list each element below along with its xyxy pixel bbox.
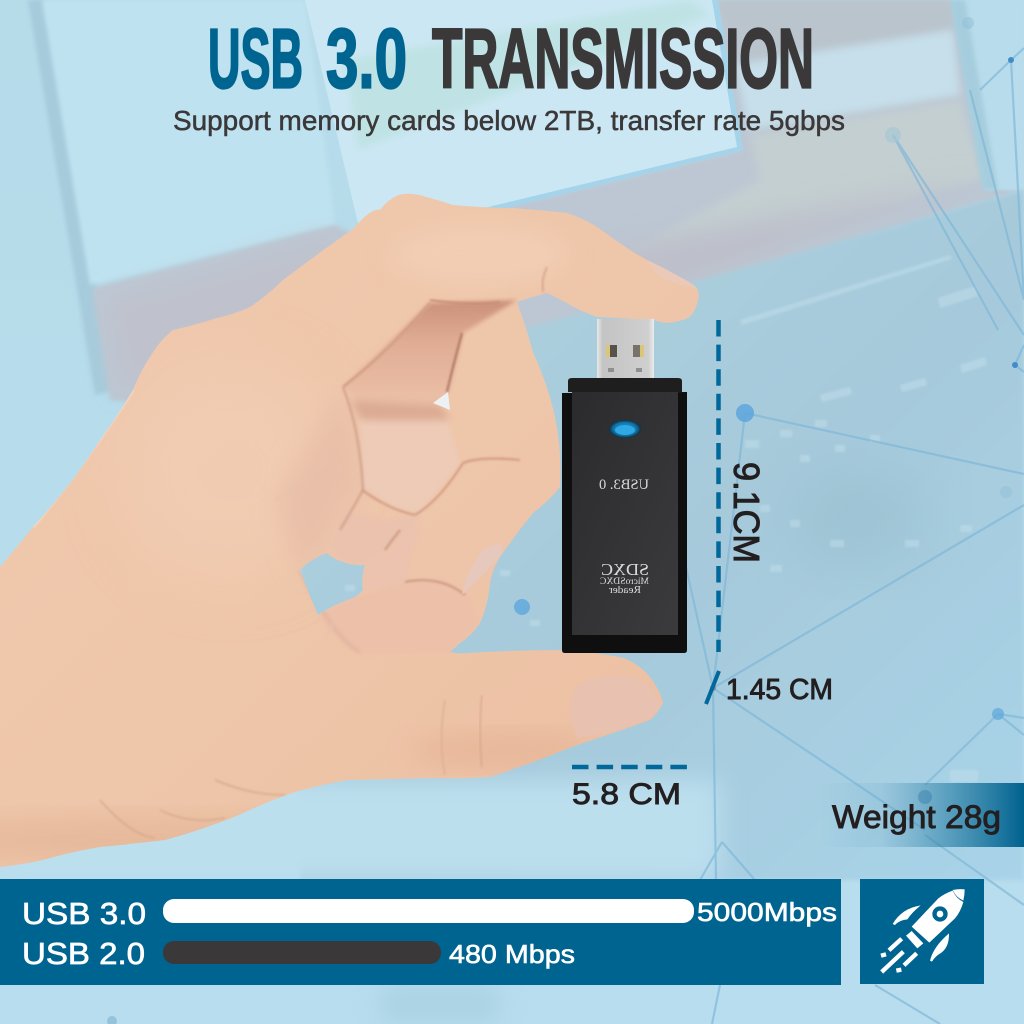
keyboard key marks in background (345, 255, 987, 782)
mirrored device print (599, 477, 649, 596)
background: network lines (680, 48, 1024, 1024)
mirrored device print: Reader (609, 584, 641, 596)
USB 3.0 label: USB 3.0 (22, 896, 146, 931)
height label: 9.1CM (726, 462, 767, 563)
depth label: 1.45 CM (726, 674, 833, 706)
USB card reader device (562, 319, 687, 653)
title (208, 12, 814, 106)
thumbnail (570, 676, 661, 738)
speed comparison panel (0, 879, 841, 985)
title: USB (208, 12, 303, 106)
width label: 5.8 CM (572, 778, 681, 811)
ring finger (320, 578, 480, 655)
USB 2.0 label: USB 2.0 (22, 936, 145, 971)
gap highlight between fingers (433, 392, 450, 410)
weight band (820, 783, 1024, 847)
reader cap (568, 378, 682, 392)
reader body (562, 392, 687, 653)
USB 2.0 bar (163, 941, 441, 964)
icon: rocket (881, 889, 965, 972)
height dimension dashed line (716, 320, 721, 652)
USB 2.0 value: 480 Mbps (449, 939, 575, 969)
depth tick (706, 671, 719, 704)
title: 3.0 (326, 12, 407, 106)
inner curled finger lower (360, 417, 460, 513)
weight band: Weight 28g (832, 799, 1001, 835)
USB connector (597, 319, 654, 379)
third finger (330, 510, 417, 565)
subtitle: Support memory cards below 2TB, transfer rate 5gbps (173, 105, 845, 136)
index fingernail (647, 260, 697, 288)
mirrored device print: USB3. 0 (599, 477, 649, 493)
LED indicator (609, 420, 641, 438)
palm-side fold (284, 426, 350, 544)
mirrored device print: MicroSDXC (600, 576, 649, 586)
reader face (572, 392, 678, 635)
USB 3.0 value: 5000Mbps (697, 897, 837, 927)
inner curled finger top (343, 300, 517, 407)
mirrored device print: SDXC (601, 560, 649, 579)
hand holding card reader (0, 180, 710, 870)
middle fingernail (462, 543, 503, 595)
rocket icon tile (860, 879, 984, 984)
width dimension dashed line (572, 765, 687, 769)
USB 3.0 bar (163, 899, 694, 923)
